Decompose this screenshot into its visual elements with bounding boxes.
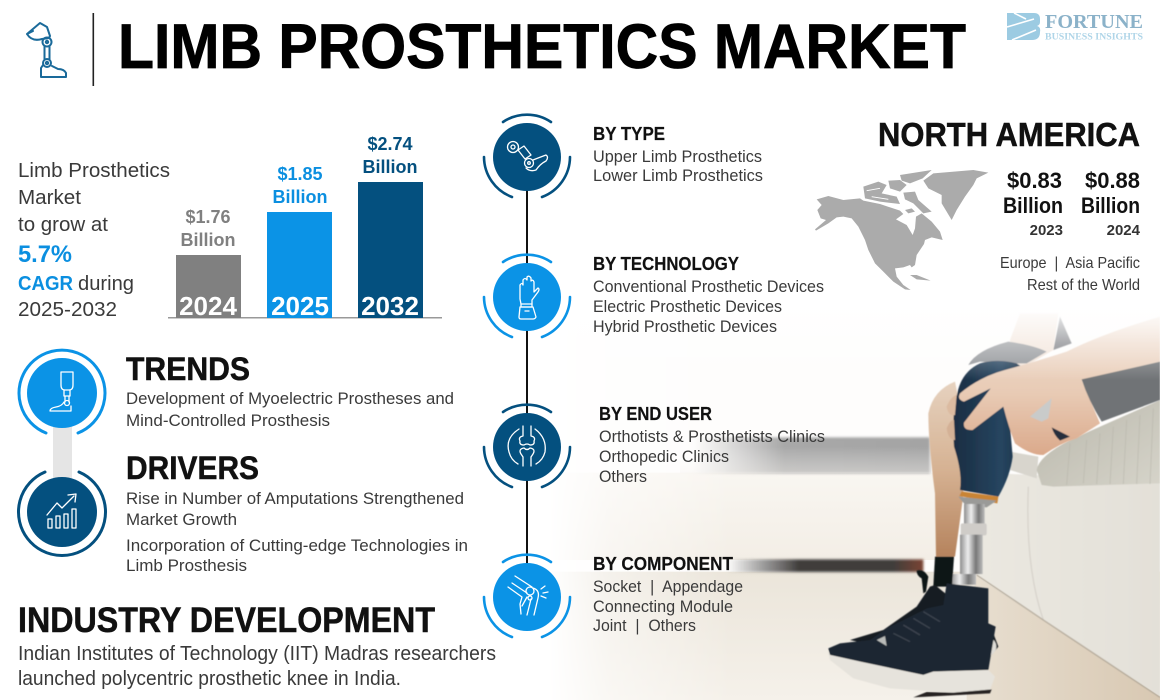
text: by type: BY TYPE <box>593 124 665 144</box>
sneakers <box>933 557 954 587</box>
text: by component: Connecting Module <box>593 598 733 616</box>
icon: by technology <box>484 255 570 337</box>
text: by technology: BY TECHNOLOGY <box>593 254 739 274</box>
CAGR text block: 5.7% <box>18 241 72 268</box>
text: by end user: Others <box>599 468 647 486</box>
trends block: Mind-Controlled Prosthesis <box>126 411 330 430</box>
text: by component <box>593 554 743 635</box>
pylon <box>958 497 997 507</box>
torso and shirt triangle <box>1010 313 1058 373</box>
other regions: Rest of the World <box>1027 277 1140 294</box>
connector: trends to drivers <box>53 425 72 480</box>
CAGR text block: CAGR <box>18 273 74 295</box>
cushions <box>1010 452 1038 478</box>
CAGR text block: Limb Prosthetics <box>18 160 170 182</box>
text: by component: Joint | Others <box>593 617 696 635</box>
back leg <box>928 382 967 557</box>
drivers block: Rise in Number of Amputations Strengthened <box>126 489 464 508</box>
industry development block: launched polycentric prosthetic knee in India. <box>18 668 401 690</box>
timeline line <box>526 185 528 570</box>
text: by type: Upper Limb Prosthetics <box>593 148 762 166</box>
CAGR text block <box>18 160 170 321</box>
drivers block: Limb Prosthesis <box>126 556 247 575</box>
icon: by type <box>484 115 570 197</box>
text: by component: Socket | Appendage <box>593 578 743 596</box>
north america values <box>1003 168 1141 239</box>
other regions <box>1000 255 1140 294</box>
drivers block: Market Growth <box>126 510 237 529</box>
bar chart: 2024 <box>179 291 237 321</box>
north america values: 2024 <box>1107 222 1141 239</box>
north america heading: NORTH AMERICA <box>878 116 1140 153</box>
drivers block: DRIVERS <box>126 450 259 486</box>
text: by component: BY COMPONENT <box>593 554 733 574</box>
bar chart: 2032 <box>361 291 419 321</box>
industry development block: Indian Institutes of Technology (IIT) Madras researchers <box>18 643 496 665</box>
text: by technology <box>593 254 824 336</box>
icon: prosthetic leg logo <box>27 23 66 77</box>
divider <box>92 13 94 86</box>
north america values: $0.83 <box>1007 168 1062 193</box>
text: by end user: BY END USER <box>599 404 712 424</box>
industry development block: INDUSTRY DEVELOPMENT <box>18 601 435 640</box>
icon: by component <box>484 555 570 637</box>
text: by type <box>593 124 763 185</box>
bar chart: Billion <box>362 157 418 177</box>
CAGR text block: to grow at <box>18 214 108 236</box>
grey fabric over knee <box>968 342 1047 365</box>
trends block <box>126 351 454 430</box>
north america values: $0.88 <box>1085 168 1140 193</box>
logo: Fortune Business Insights <box>1007 11 1143 42</box>
bar chart: Billion <box>180 230 236 250</box>
text: by technology: Electric Prosthetic Devices <box>593 298 782 316</box>
text: by end user: Orthotists & Prosthetists Clinics <box>599 428 825 446</box>
text: by technology: Conventional Prosthetic Devices <box>593 278 824 296</box>
other regions: Europe | Asia Pacific <box>1000 255 1140 272</box>
CAGR text block: 2025-2032 <box>18 299 117 321</box>
text: by technology: Hybrid Prosthetic Devices <box>593 318 777 336</box>
north america values: Billion <box>1081 193 1140 218</box>
bar chart: Billion <box>272 187 328 207</box>
CAGR text block: Market <box>18 187 81 209</box>
drivers block: Incorporation of Cutting-edge Technologies in <box>126 536 468 555</box>
text: by end user <box>599 404 825 486</box>
hand and arm <box>959 317 1160 455</box>
bar chart: 2025 <box>271 291 329 321</box>
icon: by end user <box>484 405 570 487</box>
background photo: prosthetic leg on sofa <box>574 318 1160 700</box>
map: North America <box>815 170 988 290</box>
trends block: TRENDS <box>126 351 250 387</box>
icon: trends prosthetic leg <box>19 350 105 433</box>
trends block: Development of Myoelectric Prostheses and <box>126 389 454 408</box>
industry development block <box>18 601 496 690</box>
prosthetic socket <box>953 361 1027 497</box>
text: by type: Lower Limb Prosthetics <box>593 167 763 185</box>
logo: Fortune Business Insights: FORTUNE <box>1045 11 1143 33</box>
bar chart <box>168 134 442 321</box>
text: by end user: Orthopedic Clinics <box>599 448 729 466</box>
title: LIMB PROSTHETICS MARKET <box>118 12 966 82</box>
logo: Fortune Business Insights: BUSINESS INSIGHTS <box>1045 32 1143 42</box>
bar chart: $1.85 <box>277 164 323 184</box>
icon: drivers chart <box>18 472 105 556</box>
bar chart: $2.74 <box>367 134 413 154</box>
drivers block <box>126 450 468 575</box>
bar chart: $1.76 <box>185 207 231 227</box>
CAGR text block: during <box>78 273 134 295</box>
north america values: Billion <box>1003 193 1063 218</box>
north america values: 2023 <box>1030 222 1063 239</box>
